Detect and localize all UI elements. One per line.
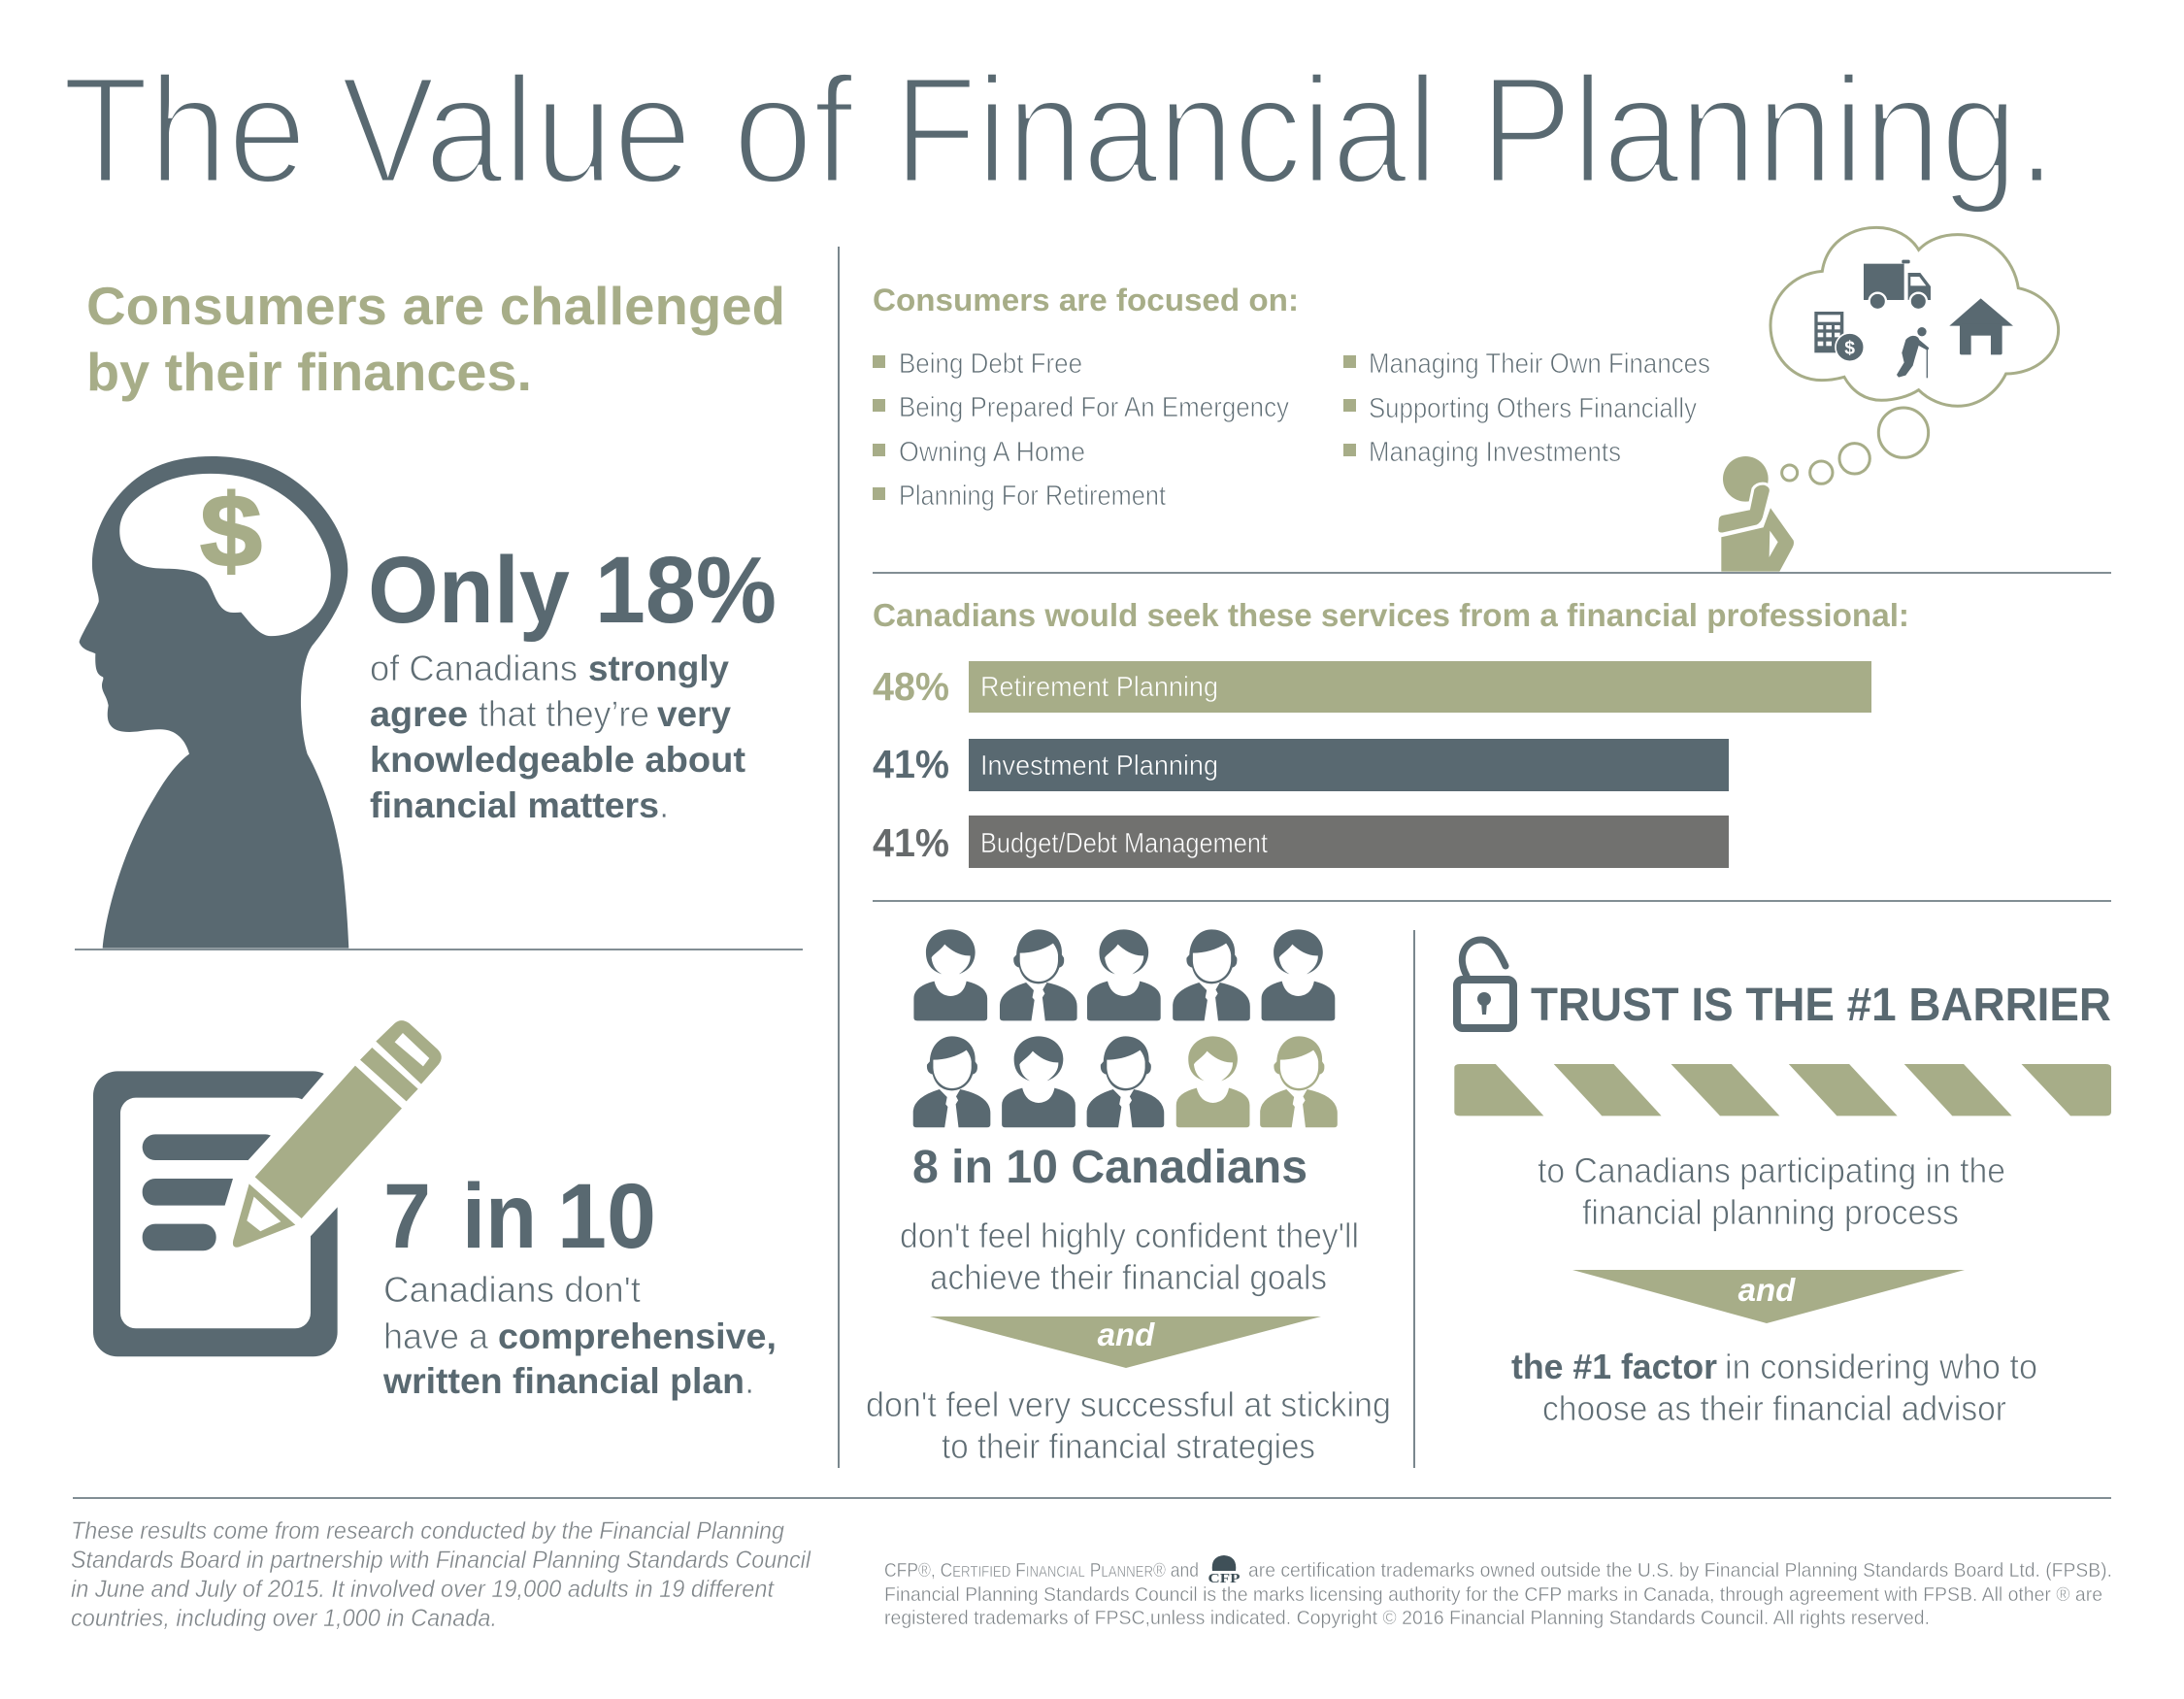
footnote: research source: Standards Board in partnership with Financial Planning Standards Council: [71, 1547, 811, 1574]
bar: retirement planning 48%: Retirement Planning: [980, 672, 1218, 703]
list: right column of focus items: Supporting Others Financially: [1369, 393, 1697, 424]
text: strategies statement: don't feel very successful at sticking: [866, 1384, 1391, 1424]
barrier stripes: [1454, 1064, 2111, 1116]
footnote: research source: in June and July of 2015. It involved over 19,000 adults in 19 different: [71, 1576, 775, 1603]
title: The: [62, 46, 307, 216]
stat: 7 in 10: [383, 1165, 656, 1268]
text: only 18% description: [370, 649, 745, 825]
arrow: and (left): and: [1098, 1316, 1155, 1352]
text: 7 in 10 description: [382, 1270, 777, 1401]
title: Value: [341, 46, 692, 216]
heading: consumers are challenged: Consumers are challenged: [86, 276, 785, 336]
text: only 18% description: .: [659, 785, 669, 825]
text: 7 in 10 description: written financial plan: [382, 1361, 745, 1401]
icon: document and pencil: [93, 1020, 442, 1356]
bar: budget debt management 41%: 41%: [873, 820, 949, 865]
icon: head with dollar brain: $: [200, 474, 262, 588]
bar: investment planning 41%: Investment Planning: [980, 750, 1218, 782]
stat: 7 in 10: 7: [383, 1165, 431, 1268]
list: right column of focus items: Managing Investments: [1369, 437, 1621, 468]
text: #1 factor statement: the #1 factor: [1511, 1347, 1717, 1386]
text: confidence statement: don't feel highly confident they'll: [900, 1216, 1359, 1255]
icon: head with dollar brain: [80, 456, 348, 949]
bar: retirement planning 48%: 48%: [873, 664, 949, 709]
text: #1 factor statement: [1511, 1347, 2037, 1428]
title: Planning.: [1480, 46, 2056, 216]
stat: only 18%: Only 18%: [368, 537, 777, 643]
panel divider: trust: [1413, 930, 1415, 1468]
list: right column of focus items: Managing Their Own Finances: [1369, 349, 1710, 380]
heading: consumers are challenged: [86, 276, 785, 402]
title: [62, 46, 2056, 216]
footnote: research source: [71, 1517, 811, 1632]
heading: consumers are challenged: by their finances.: [86, 342, 532, 402]
divider: right panel upper: [873, 572, 2111, 574]
text: to canadians participating: [1538, 1150, 2005, 1232]
divider: left panel: [75, 949, 803, 950]
stat: 7 in 10: 10: [557, 1165, 656, 1268]
text: only 18% description: knowledgeable about: [370, 740, 745, 780]
text: #1 factor statement: choose as their financial advisor: [1542, 1388, 2006, 1428]
footnote: research source: These results come from research conducted by the Financial Planning: [71, 1517, 784, 1545]
title: Financial: [894, 46, 1438, 216]
heading: consumers are focused on: Consumers are focused on:: [873, 283, 1299, 317]
divider: footer: [73, 1497, 2111, 1499]
footnote: trademark notice: CFP®, CERTIFIED FINANCIAL PLANNER® and: [884, 1559, 1199, 1582]
icon: open padlock: [1457, 940, 1513, 1028]
footnote: trademark notice: registered trademarks of FPSC,unless indicated. Copyright © 2016 Financial Planning Standards Council. All rights reserved.: [884, 1607, 1930, 1629]
text: confidence statement: achieve their financial goals: [930, 1257, 1327, 1297]
text: 7 in 10 description: Canadians don't: [383, 1270, 642, 1310]
arrow: and (right): [1572, 1270, 1965, 1323]
title: of: [733, 46, 853, 216]
list: left column of focus items: Owning A Home: [899, 437, 1085, 468]
text: 7 in 10 description: .: [745, 1361, 754, 1401]
list: left column of focus items: Planning For Retirement: [899, 481, 1166, 512]
text: #1 factor statement: in considering who to: [1725, 1347, 2037, 1386]
text: only 18% description: financial matters: [370, 785, 659, 825]
icon: thinking person with thought cloud: [1717, 227, 2059, 572]
heading: trust is the #1 barrier: TRUST IS THE #1 BARRIER: [1531, 980, 2111, 1031]
text: only 18% description: very: [657, 694, 731, 734]
text: only 18% description: agree: [370, 694, 468, 734]
list: left column of focus items: [873, 349, 1289, 512]
footnote: trademark notice: [884, 1559, 2112, 1629]
text: strategies statement: to their financial strategies: [942, 1426, 1315, 1466]
bar: budget debt management 41%: [873, 816, 1729, 868]
footnote: trademark notice: are certification trademarks owned outside the U.S. by Financial Planning Standards Board Ltd. (FPSB).: [1248, 1559, 2112, 1582]
bar: investment planning 41%: [873, 739, 1729, 791]
arrow: and (right): and: [1738, 1272, 1796, 1308]
list: right column of focus items: [1343, 349, 1710, 468]
icon: thinking person with thought cloud: $: [1844, 339, 1855, 359]
text: 7 in 10 description: have a: [383, 1316, 488, 1356]
divider: right panel lower: [873, 900, 2111, 902]
text: confidence statement: [900, 1216, 1359, 1297]
bar: budget debt management 41%: Budget/Debt Management: [980, 828, 1268, 859]
panel divider: main vertical: [838, 247, 840, 1468]
text: 7 in 10 description: comprehensive,: [498, 1316, 777, 1356]
list: left column of focus items: Being Prepared For An Emergency: [899, 392, 1289, 423]
icon: CFP logo: [1208, 1555, 1241, 1586]
pictogram: 8 in 10 people: [913, 929, 1338, 1127]
footnote: trademark notice: Financial Planning Standards Council is the marks licensing authority for the CFP marks in Canada, through agreement with FPSB. All other ® are: [884, 1583, 2102, 1606]
text: only 18% description: that they’re: [479, 694, 649, 734]
text: to canadians participating: financial planning process: [1582, 1192, 1959, 1232]
stat: 8 in 10 canadians: 8 in 10 Canadians: [912, 1142, 1307, 1193]
icon: CFP logo: CFP: [1208, 1572, 1241, 1586]
bar: investment planning 41%: 41%: [873, 742, 949, 786]
text: only 18% description: of Canadians: [370, 649, 578, 688]
footnote: research source: countries, including over 1,000 in Canada.: [71, 1605, 497, 1632]
text: to canadians participating: to Canadians participating in the: [1538, 1150, 2005, 1190]
bar: retirement planning 48%: [873, 661, 1871, 713]
stat: 7 in 10: in: [462, 1165, 537, 1268]
bar chart: services: [873, 661, 1871, 868]
text: strategies statement: [866, 1384, 1391, 1466]
arrow: and (left): [930, 1316, 1321, 1368]
heading: canadians would seek: Canadians would seek these services from a financial professional:: [873, 597, 1909, 633]
list: left column of focus items: Being Debt Free: [899, 349, 1082, 380]
text: only 18% description: strongly: [588, 649, 729, 688]
